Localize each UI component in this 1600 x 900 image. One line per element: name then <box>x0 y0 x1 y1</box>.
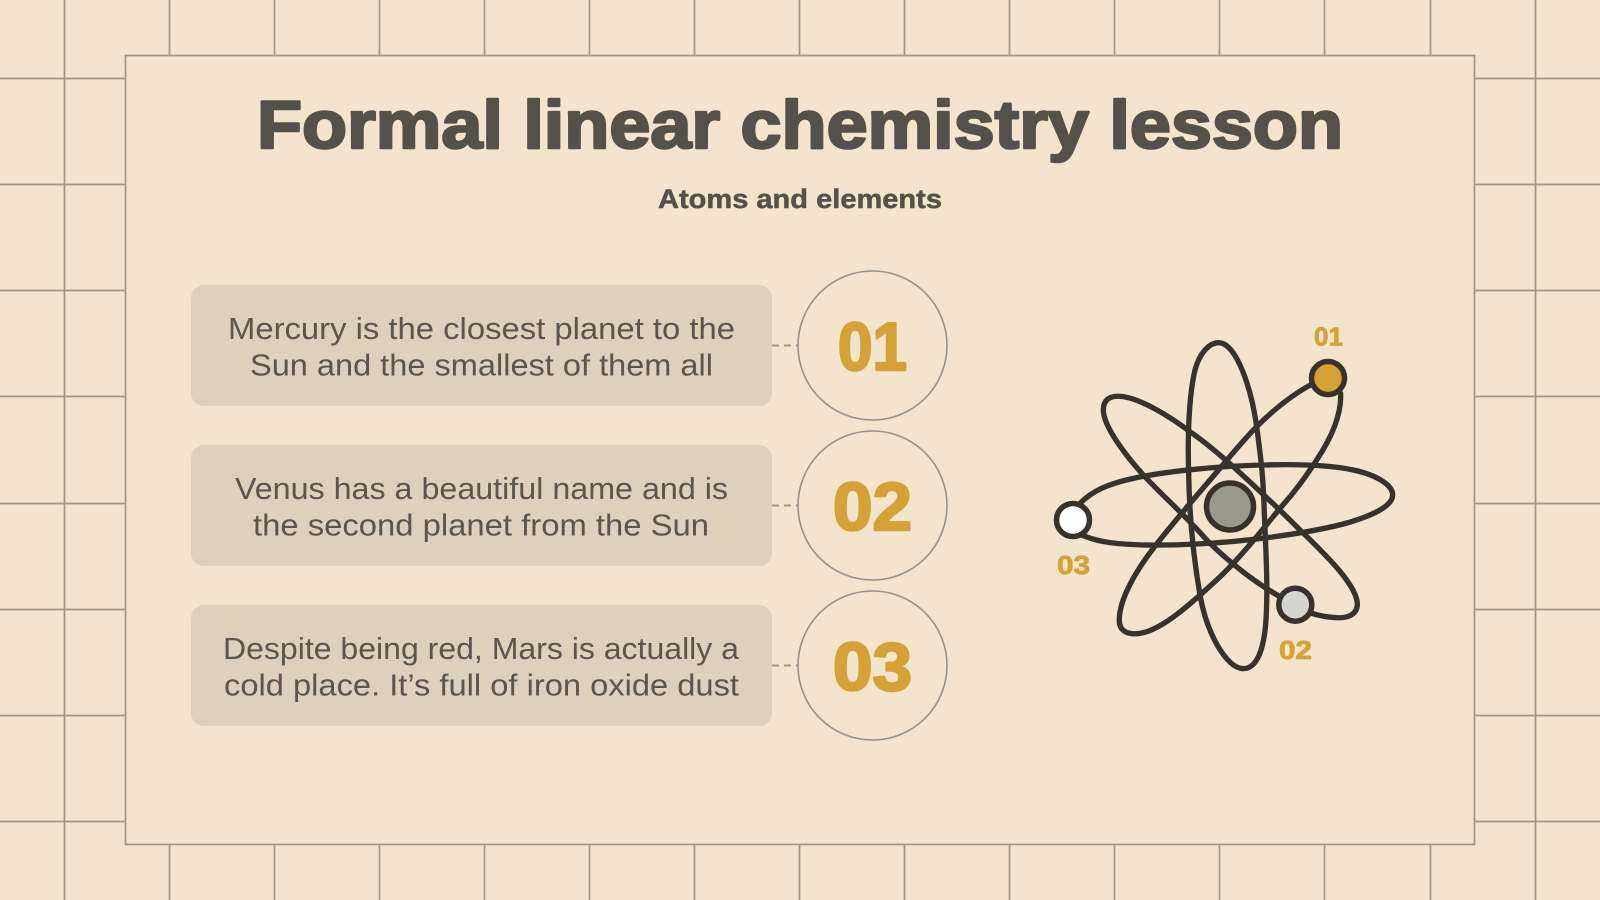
nucleus <box>1206 483 1254 530</box>
number circle 02: 02 <box>833 469 912 545</box>
atom orbits <box>1080 343 1393 669</box>
subtitle: Atoms and elements <box>658 184 942 214</box>
item 02: Venus <box>191 431 947 580</box>
number circle 01 <box>798 271 947 420</box>
label 02: 02 <box>1279 635 1312 665</box>
number circle 02 <box>798 431 947 580</box>
text box 01 <box>191 285 772 406</box>
text box 03 <box>191 605 772 726</box>
text box 02 <box>191 445 772 566</box>
panel: main frame <box>126 56 1474 844</box>
electron 03 <box>1056 504 1090 536</box>
item 03: Mars <box>191 591 947 740</box>
text box 03: cold place. It’s full of iron oxide dust <box>224 668 739 702</box>
number circle 01: 01 <box>838 309 907 385</box>
text box 02: Venus has a beautiful name and is <box>235 471 728 506</box>
text box 03: Despite being red, Mars is actually a <box>223 631 740 666</box>
electron 01 <box>1312 362 1344 394</box>
number circle 03 <box>798 591 947 740</box>
item 01: Mercury <box>191 271 947 420</box>
electron 02 <box>1279 588 1312 621</box>
text box 01: Mercury is the closest planet to the <box>228 311 735 346</box>
label 01: 01 <box>1314 322 1343 352</box>
text box 01: Sun and the smallest of them all <box>250 348 713 382</box>
text box 02: the second planet from the Sun <box>253 508 709 542</box>
number circle 03: 03 <box>833 629 912 705</box>
label 03: 03 <box>1057 550 1090 580</box>
icon: atom diagram <box>1056 322 1393 669</box>
title: Formal linear chemistry lesson <box>257 87 1343 163</box>
